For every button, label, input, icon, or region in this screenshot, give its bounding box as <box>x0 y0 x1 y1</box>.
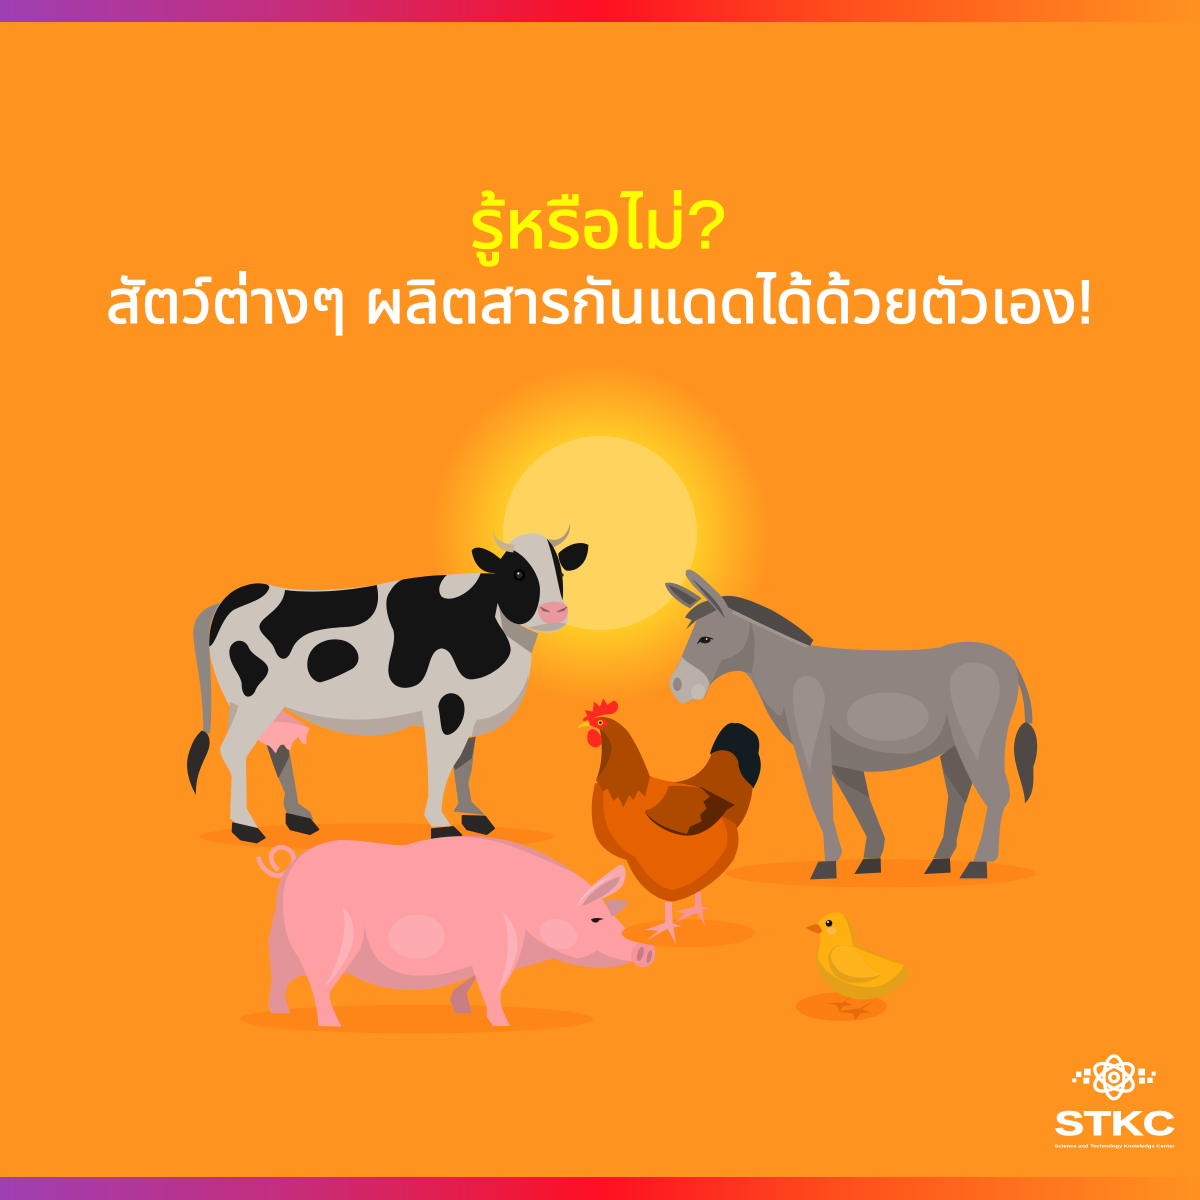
logo atom icon <box>1091 1056 1137 1099</box>
logo wordmark: STKC <box>1055 1105 1175 1143</box>
title <box>106 187 1094 336</box>
illustration: pig <box>240 836 655 1033</box>
illustration: donkey <box>665 570 1037 887</box>
top gradient bar <box>0 0 1200 22</box>
illustration: chick <box>796 912 909 1021</box>
logo tagline: Science and Technology Knowledge Center <box>1055 1144 1175 1149</box>
bottom gradient bar <box>0 1177 1200 1200</box>
sun <box>430 363 770 703</box>
illustration: hen <box>577 698 761 947</box>
subheading: สัตว์ต่างๆ ผลิตสารกันแดดได้ด้วยตัวเอง! <box>106 268 1094 336</box>
heading: did you know: รู้หรือไม่? <box>470 187 726 266</box>
logo: STKC <box>1055 1056 1175 1149</box>
illustration: cow <box>187 522 588 850</box>
hen feet <box>645 892 710 944</box>
chick feet <box>825 997 875 1021</box>
logo pixel dots <box>1072 1069 1156 1084</box>
